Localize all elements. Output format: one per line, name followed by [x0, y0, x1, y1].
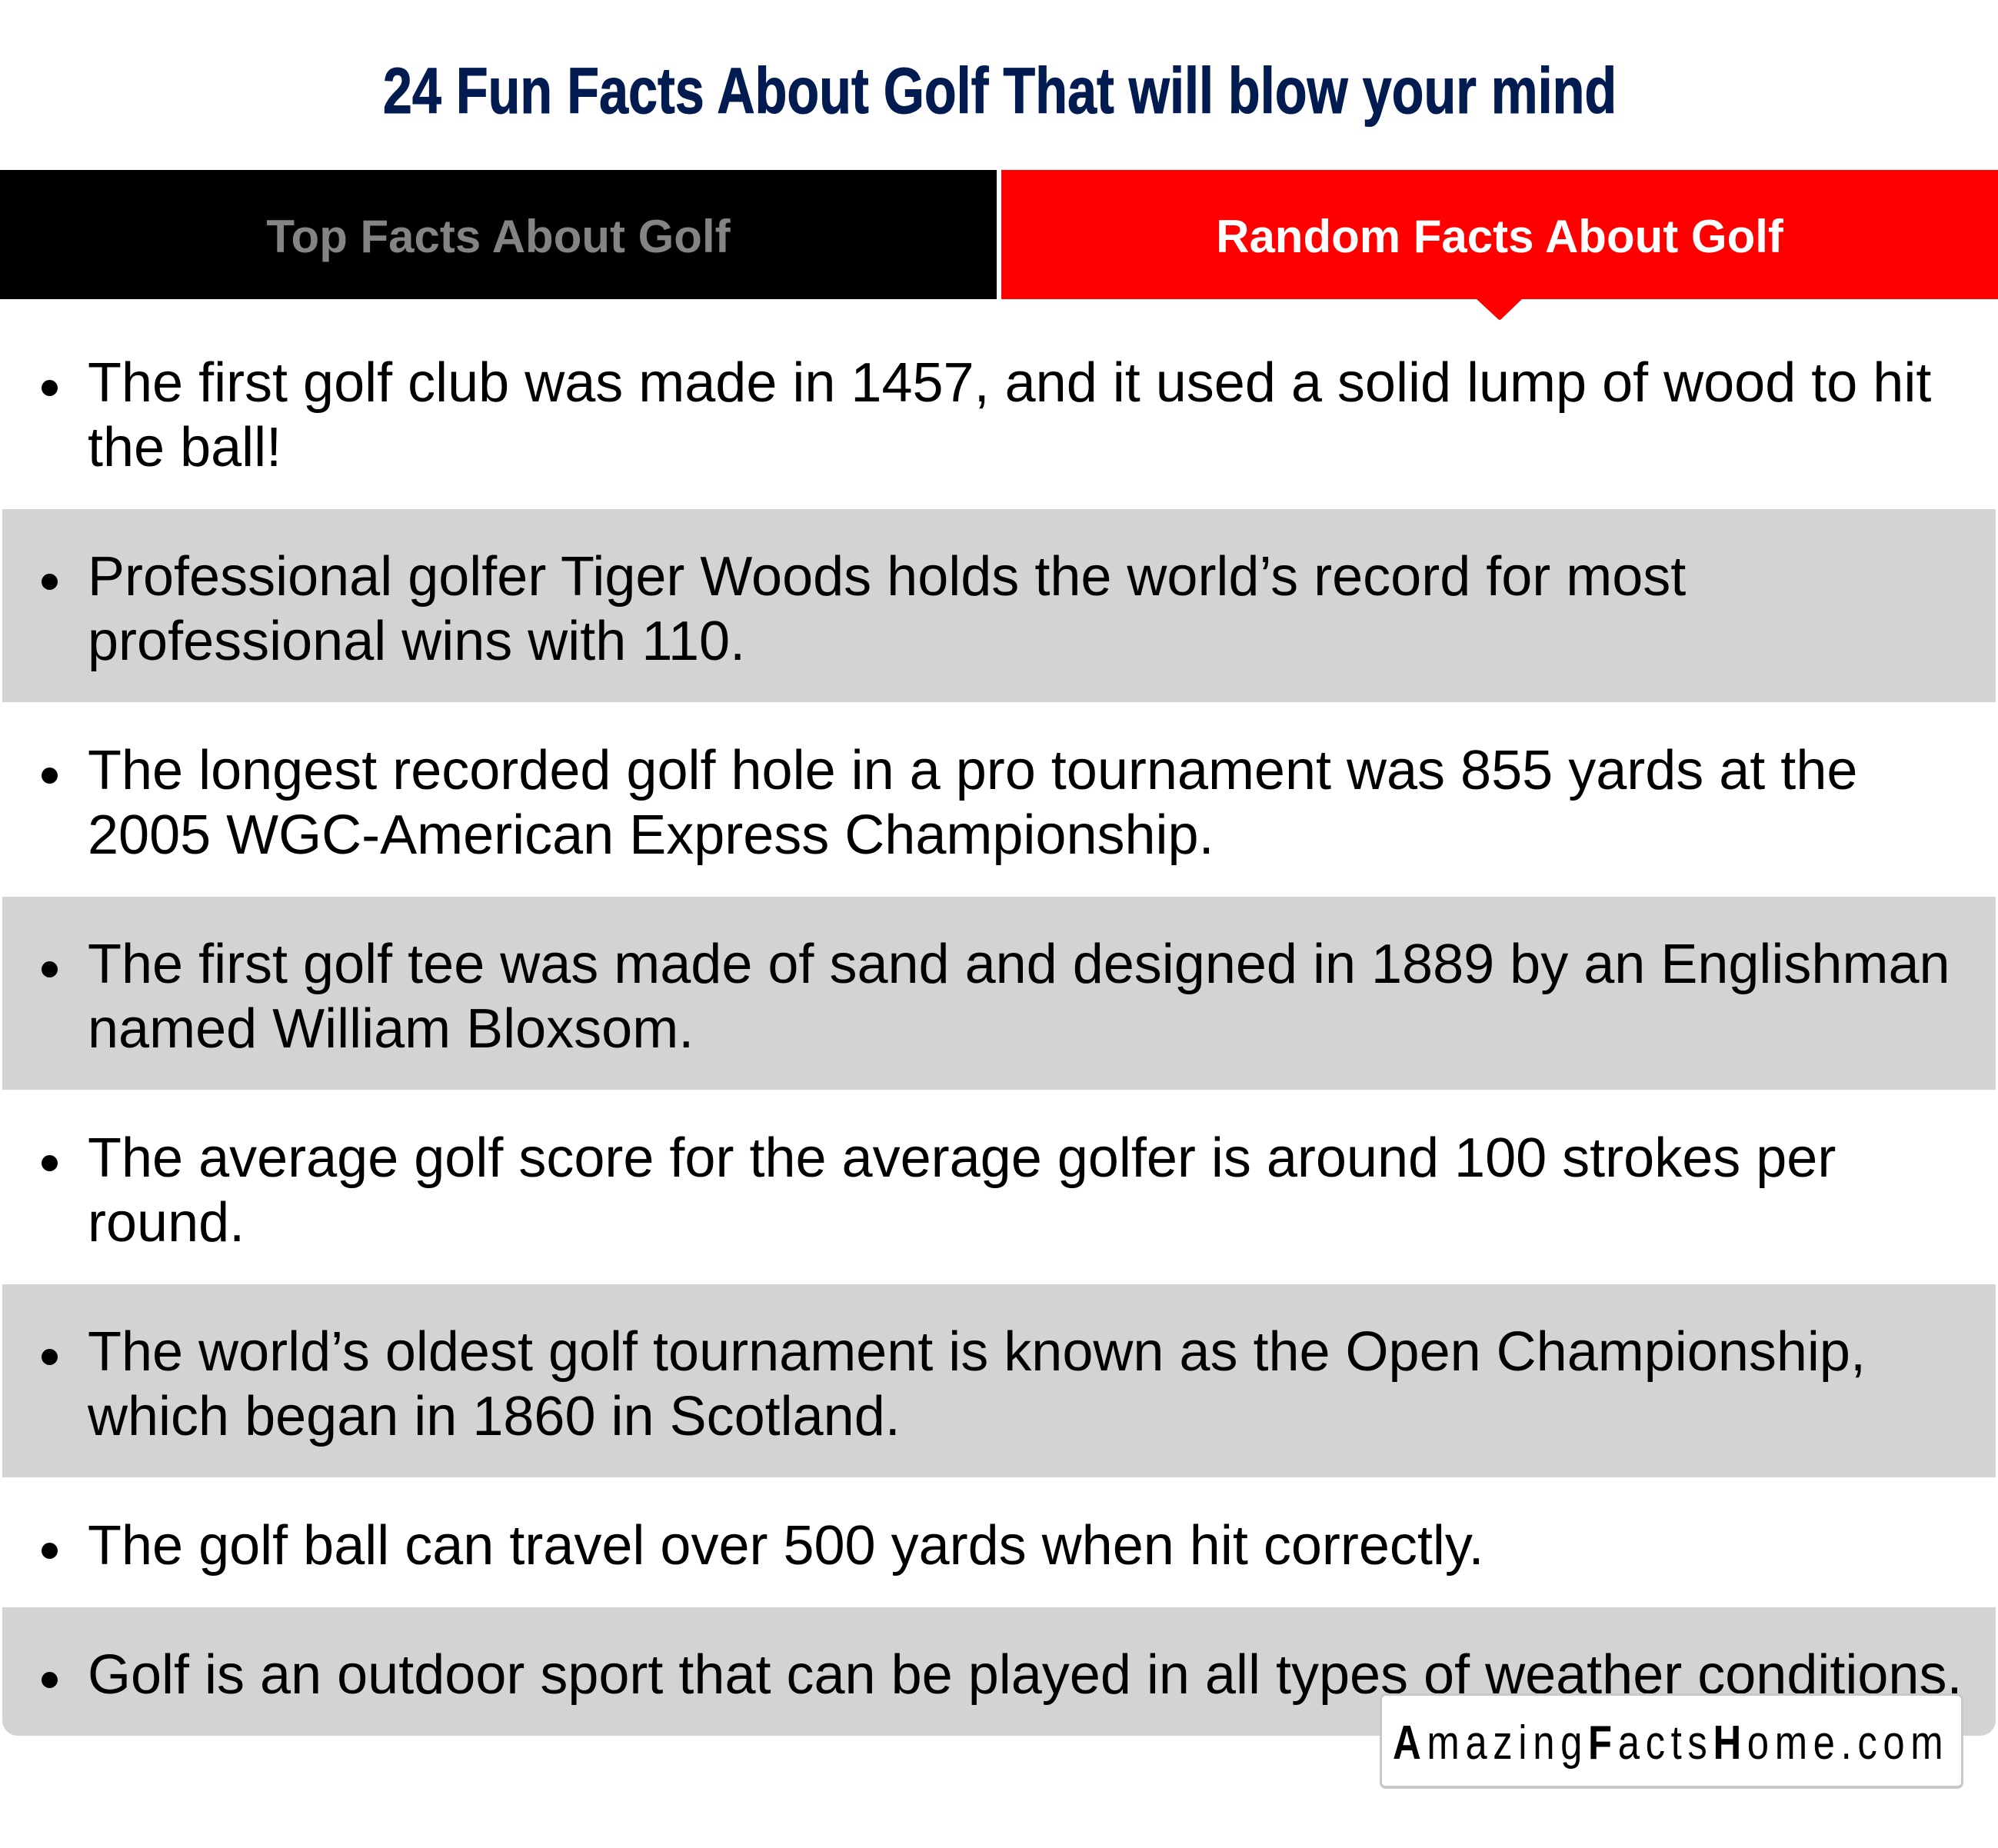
fact 1: the ball!: [88, 417, 281, 478]
tab: random facts: Random Facts About Golf: [1216, 211, 1783, 262]
tab: random facts: [1001, 170, 1998, 299]
fact 6: which began in 1860 in Scotland.: [88, 1386, 901, 1447]
fact 8: [2, 1607, 1996, 1736]
fact 5: [42, 1127, 1836, 1254]
fact 4: [2, 897, 1996, 1090]
fact 7: The golf ball can travel over 500 yards when hit correctly.: [88, 1515, 1484, 1577]
fact 3: The longest recorded golf hole in a pro tournament was 855 yards at the: [88, 740, 1857, 801]
fact 2: professional wins with 110.: [88, 611, 745, 672]
fact 2: [2, 509, 1996, 702]
fact 3: [42, 740, 1857, 866]
fact 5: The average golf score for the average golfer is around 100 strokes per: [88, 1127, 1836, 1189]
fact 3: 2005 WGC-American Express Championship.: [88, 804, 1214, 866]
tab: top facts: Top Facts About Golf: [266, 211, 731, 262]
fact 4: The first golf tee was made of sand and designed in 1889 by an Englishman: [88, 934, 1950, 995]
fact 4: named William Bloxsom.: [88, 998, 694, 1060]
fact 2: Professional golfer Tiger Woods holds the world’s record for most: [88, 546, 1686, 608]
fact 1: [42, 352, 1931, 478]
fact 1: The first golf club was made in 1457, and it used a solid lump of wood to hit: [88, 352, 1931, 414]
fact 5: round.: [88, 1192, 245, 1254]
watermark: [1380, 1693, 1963, 1789]
fact 8: Golf is an outdoor sport that can be played in all types of weather conditions.: [88, 1644, 1962, 1706]
title: 24 Fun Facts About Golf That will blow your mind: [383, 55, 1617, 127]
watermark: AmazingFactsHome.com: [1393, 1716, 1949, 1770]
icon: active tab arrow: [1477, 299, 1522, 320]
fact 6: [2, 1284, 1996, 1477]
tab: top facts: [0, 170, 997, 299]
fact 6: The world’s oldest golf tournament is known as the Open Championship,: [88, 1321, 1866, 1383]
